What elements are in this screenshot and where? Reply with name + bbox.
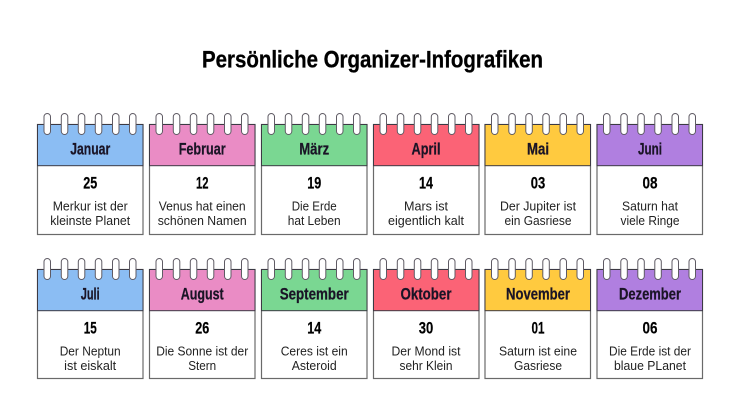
calendar card: August: August (181, 286, 224, 304)
calendar card: Dezember: Dezember (619, 286, 681, 304)
calendar card: Februar: schönen Namen (158, 214, 247, 228)
calendar card: Juli: Juli (81, 286, 100, 304)
calendar card: April (374, 114, 479, 234)
calendar card: Februar: 12 (196, 174, 208, 192)
calendar card: Juli (38, 258, 143, 378)
calendar card: Juni (597, 114, 702, 234)
calendar card: Januar (38, 114, 143, 234)
calendar card: April: eigentlich kalt (388, 214, 465, 228)
calendar card: März: Die Erde (292, 200, 337, 214)
calendar card: Dezember (597, 258, 702, 378)
calendar card: September: September (280, 286, 349, 304)
calendar card: Januar: Januar (70, 140, 111, 158)
calendar card: November: 01 (532, 320, 544, 338)
calendar card: April: Mars ist (404, 200, 449, 214)
calendar card: Mai: ein Gasriese (504, 214, 572, 228)
calendar card: August: Die Sonne ist der (156, 345, 248, 359)
calendar card: März: März (299, 140, 329, 158)
calendar card: April: April (412, 140, 440, 158)
calendar card: Januar: Merkur ist der (53, 200, 128, 214)
calendar card: Januar: kleinste Planet (50, 214, 131, 228)
calendar card: Mai: 03 (531, 174, 545, 192)
calendar card: Februar: Februar (179, 140, 226, 158)
calendar card: August (150, 258, 255, 378)
calendar card: März (262, 114, 367, 234)
calendar card: Juni: viele Ringe (620, 214, 680, 228)
calendar card: Mai (485, 114, 590, 234)
calendar card: Dezember: 06 (642, 320, 658, 338)
calendar card: Juni: 08 (642, 174, 658, 192)
calendar card: April: 14 (419, 174, 434, 192)
calendar card: Februar: Venus hat einen (159, 200, 246, 214)
calendar card: Dezember: blaue PLanet (614, 359, 687, 373)
calendar card: September (262, 258, 367, 378)
calendar card: Juni: Saturn hat (622, 200, 679, 214)
calendar card: November: November (506, 286, 570, 304)
calendar card: Oktober (374, 258, 479, 378)
calendar card: Juli: Der Neptun (60, 345, 121, 359)
calendar card: September: Asteroid (292, 359, 337, 373)
calendar card: November (485, 258, 590, 378)
calendar card: Oktober: sehr Klein (400, 359, 453, 373)
calendar card: Dezember: Die Erde ist der (609, 345, 691, 359)
calendar card: November: Saturn ist eine (499, 345, 577, 359)
calendar card: März: 19 (307, 174, 321, 192)
calendar card: August: Stern (188, 359, 216, 373)
calendar card: Juli: ist eiskalt (64, 359, 117, 373)
calendar card: September: Ceres ist ein (281, 345, 348, 359)
calendar card: Mai: Mai (527, 140, 549, 158)
calendar card: Juni: Juni (638, 140, 662, 158)
calendar card: Oktober: Oktober (400, 286, 452, 304)
calendar card: Februar (150, 114, 255, 234)
calendar card: Januar: 25 (83, 174, 97, 192)
calendar card: Juli: 15 (84, 320, 97, 338)
calendar card: Oktober: Der Mond ist (392, 345, 461, 359)
calendar card: August: 26 (195, 320, 209, 338)
calendar card: September: 14 (307, 320, 322, 338)
title: Persönliche Organizer-Infografiken (202, 46, 543, 74)
calendar card: Mai: Der Jupiter ist (500, 200, 577, 214)
calendar card: November: Gasriese (514, 359, 562, 373)
calendar card: März: hat Leben (288, 214, 341, 228)
calendar card: Oktober: 30 (419, 320, 433, 338)
